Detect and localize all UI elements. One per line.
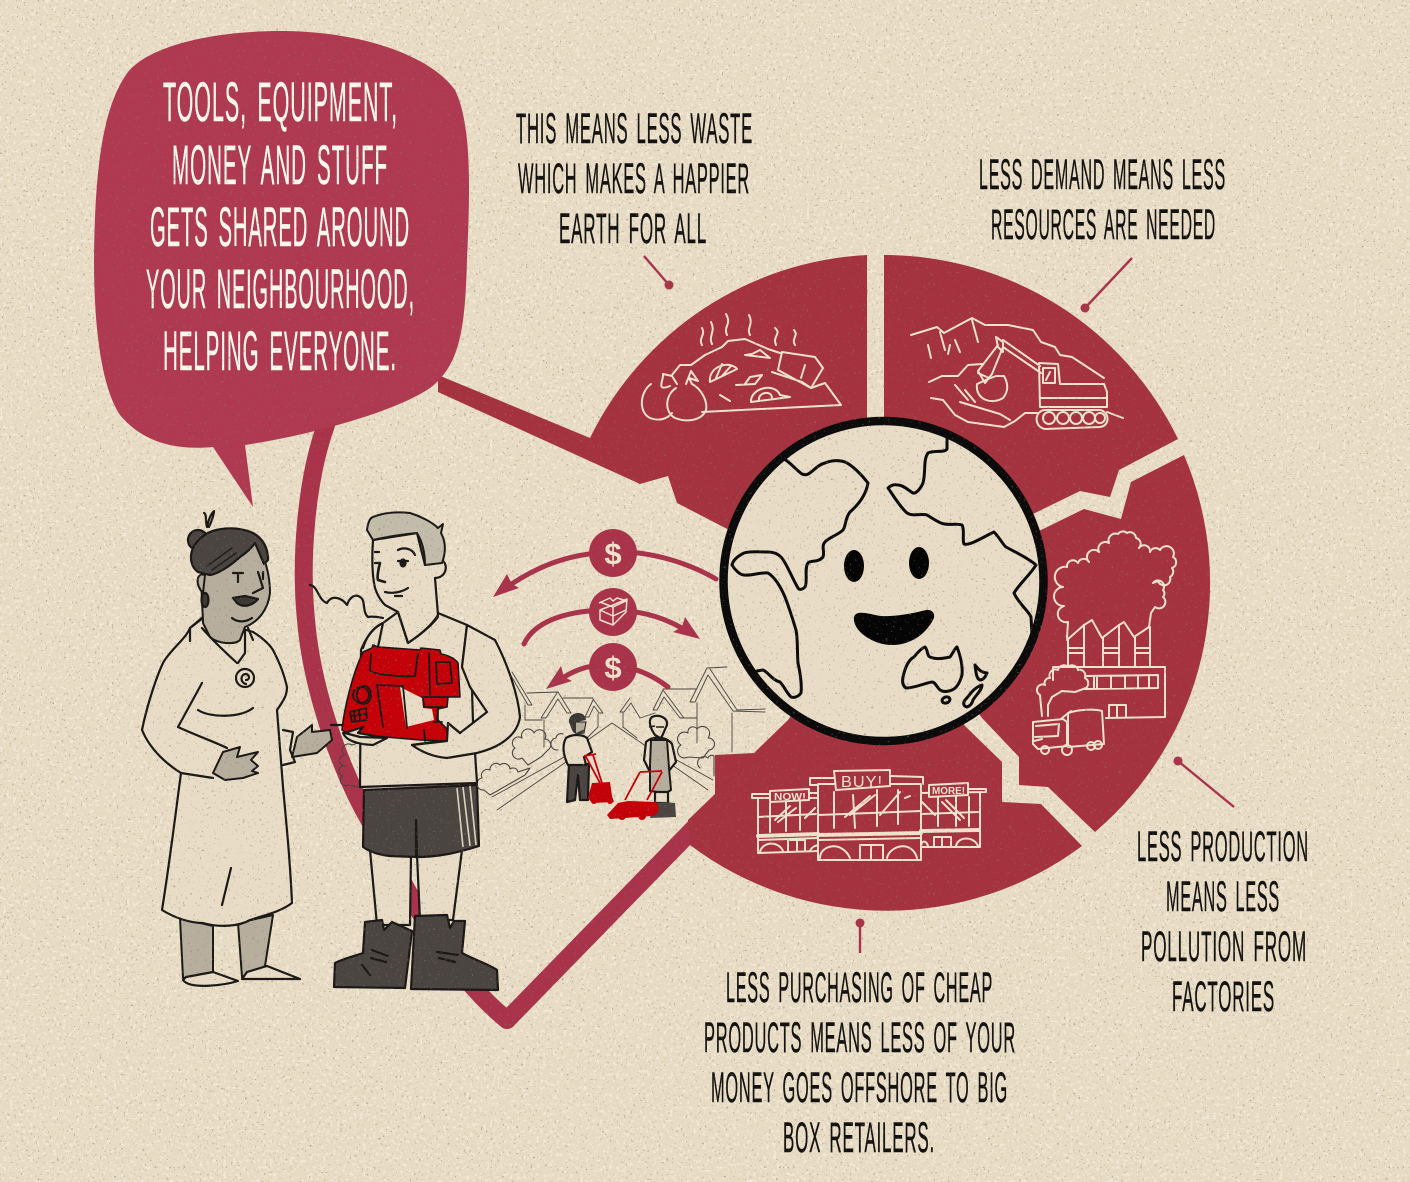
ring segment: resources — [884, 255, 1178, 581]
ring segment: purchasing — [688, 581, 1082, 911]
icon: red lawnmower, right — [607, 771, 662, 820]
bubble text — [146, 70, 415, 382]
continent: right landmass — [888, 438, 1036, 635]
person: man with turban and lawnmower — [564, 713, 592, 802]
icon: rubbish heap — [642, 314, 841, 420]
thumb, left hand — [345, 727, 387, 738]
annotation: less purchasing: BOX RETAILERS. — [783, 1114, 935, 1162]
leader: less purchasing — [856, 918, 864, 953]
badge: shared box — [589, 588, 637, 636]
figure: woman — [142, 511, 332, 986]
machine throat — [400, 687, 434, 727]
figure: man holding sewing machine — [334, 512, 520, 990]
annotation: less purchasing — [704, 964, 1016, 1162]
leader: less production — [1174, 756, 1234, 807]
leader: less demand — [1080, 258, 1132, 312]
person: woman with glasses and lawnmower — [644, 716, 676, 818]
hair — [367, 512, 445, 565]
badge: dollar bottom: $ — [604, 650, 622, 685]
neighbourhood houses and street — [339, 667, 765, 810]
facial features — [375, 548, 415, 596]
globe with smiling face — [724, 421, 1044, 741]
icon: big box shops: MORE! — [932, 786, 965, 797]
text: GETS SHARED AROUND — [150, 195, 410, 258]
annotation: less production — [1137, 823, 1309, 1021]
eye: left — [844, 550, 864, 582]
small line near hand — [331, 724, 342, 726]
collar outline — [398, 612, 438, 643]
speech cloud squiggle — [310, 585, 383, 618]
text: WHICH MAKES A HAPPIER — [518, 155, 750, 203]
speech bubble — [94, 31, 469, 507]
text: YOUR NEIGHBOURHOOD, — [146, 257, 415, 320]
face details — [202, 572, 263, 621]
badge: dollar bottom — [589, 643, 637, 691]
flow arrow: money to the left, top — [493, 552, 716, 597]
shoulder strap lines — [363, 623, 383, 648]
cuff — [283, 730, 295, 765]
arm — [412, 625, 520, 758]
sleeveless shirt — [360, 612, 477, 787]
sewing machine — [342, 645, 460, 741]
icon: excavator on mined land — [911, 318, 1123, 429]
head and neck — [202, 543, 270, 643]
icon: factory, smoke and truck — [1033, 531, 1176, 755]
legs — [370, 850, 411, 925]
badge: dollar top — [589, 529, 637, 577]
island: Tasmania — [941, 696, 951, 704]
open hand — [292, 725, 332, 757]
speech bubble: MONEY AND STUFF — [172, 133, 388, 196]
hand under machine, left — [343, 733, 387, 745]
thumb and wrist over machine — [412, 723, 460, 745]
ring segment: production — [884, 455, 1210, 832]
leader: less waste — [644, 256, 674, 290]
legs and shoes — [180, 915, 300, 986]
continent: Australia — [903, 647, 962, 692]
eye: right — [909, 547, 929, 579]
boots — [334, 915, 498, 990]
annotation: less demand — [979, 151, 1226, 249]
machine details — [350, 653, 452, 741]
ear — [198, 575, 205, 593]
islands: New Zealand — [964, 665, 987, 707]
icon: big box shops: NOW! — [774, 792, 806, 803]
icon: red lawnmower, left — [584, 754, 614, 804]
head with neck — [372, 533, 446, 643]
icon: big box shops: BUY! — [841, 774, 883, 791]
dress — [142, 617, 292, 926]
hair with bun — [188, 528, 268, 575]
shorts stripes — [457, 786, 476, 847]
shorts — [363, 785, 479, 857]
annotation: less waste: EARTH FOR ALL — [559, 205, 707, 253]
necklace with koru — [202, 628, 254, 687]
text: TOOLS, EQUIPMENT, — [163, 70, 398, 133]
hair feather — [204, 511, 214, 527]
diagram connector band — [304, 425, 700, 1020]
continent: left landmass — [732, 459, 868, 697]
flow arrow: goods to the right — [524, 610, 700, 644]
badge: dollar top: $ — [604, 536, 622, 571]
ring segment: waste — [438, 255, 867, 581]
annotation: less waste — [516, 105, 753, 253]
smile — [854, 610, 934, 645]
hand on belly — [213, 747, 258, 780]
text: THIS MEANS LESS WASTE — [516, 105, 753, 153]
icon: big box shops — [752, 770, 986, 860]
text: HELPING EVERYONE. — [163, 319, 397, 382]
flow arrow: money to the left, bottom — [546, 665, 668, 689]
dress sleeve and folds — [178, 618, 253, 905]
